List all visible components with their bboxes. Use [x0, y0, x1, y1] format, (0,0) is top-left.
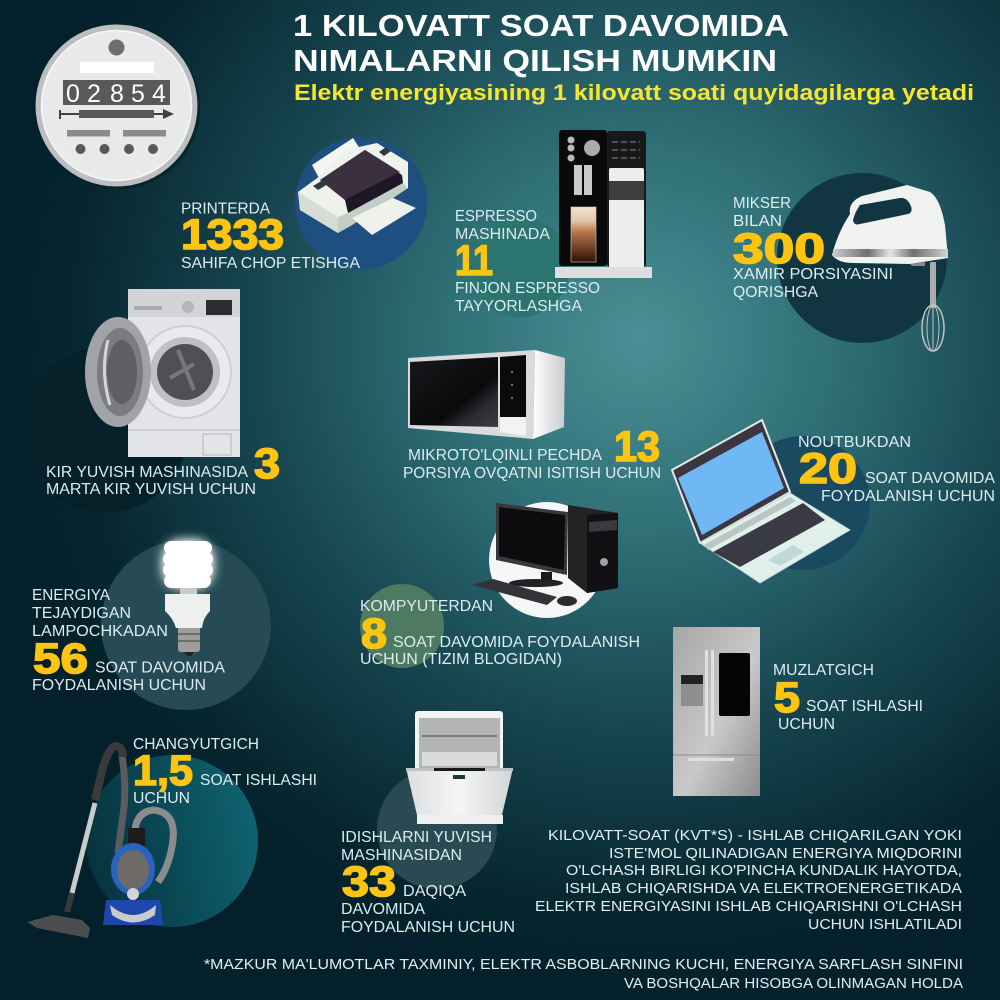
panel: vacuum cleaner: [27, 736, 317, 938]
text: washer label: 3: [254, 440, 280, 488]
icon: electricity meter: [36, 24, 200, 189]
text: laptop label: NOUTBUKDAN: [798, 434, 911, 451]
text: dishwasher label: [341, 829, 515, 936]
icon: energy-saving bulb: [162, 539, 214, 656]
text: vacuum label: [133, 736, 317, 807]
icon: electricity meter: 02854: [66, 80, 166, 108]
icon: microwave: [408, 350, 565, 439]
icon: dishwasher circle: [377, 769, 497, 889]
icon: desktop computer: [472, 503, 618, 606]
title: 1 KILOVATT SOAT DAVOMIDA: [293, 8, 789, 43]
icon: computer circle: [489, 502, 605, 618]
title: [293, 8, 789, 78]
text: lamp label: LAMPOCHKADAN: [32, 623, 168, 640]
text: refrigerator label: UCHUN: [778, 716, 835, 733]
text: laptop label: [798, 434, 995, 505]
text: refrigerator label: [773, 662, 923, 733]
footnote: [204, 957, 963, 992]
text: vacuum label: SOAT ISHLASHI: [200, 772, 317, 789]
panel: computer: [360, 502, 640, 668]
panel: printer: [181, 137, 427, 272]
text: computer label: [360, 598, 640, 668]
icon: printer: [298, 138, 416, 235]
icon: olive circle: [360, 584, 444, 668]
panel: energy-saving lamp: [32, 539, 271, 710]
text: refrigerator label: 5: [774, 674, 800, 722]
text: mixer label: 300: [733, 225, 825, 273]
icon: laptop circle: [736, 436, 870, 570]
text: lamp label: ENERGIYA: [32, 587, 110, 604]
panel: laptop: [672, 420, 995, 583]
text: espresso label: FINJON ESPRESSO: [455, 280, 600, 297]
text: printer label: [181, 200, 360, 272]
text: washer label: MARTA KIR YUVISH UCHUN: [46, 481, 256, 498]
text: lamp label: [32, 587, 225, 694]
icon: vacuum cleaner: [27, 746, 173, 938]
text: dishwasher label: DAQIQA: [403, 883, 466, 900]
text: microwave label: 13: [614, 423, 660, 471]
text: lamp label: 56: [33, 635, 88, 683]
text: mixer label: MIKSER: [733, 195, 791, 212]
text block: kilowatt-hour definition: KILOVATT-SOAT (KVT*S) - ISHLAB CHIQARILGAN YOKI: [548, 828, 962, 844]
text: laptop label: SOAT DAVOMIDA: [865, 470, 995, 487]
panel: washing machine: [22, 289, 280, 513]
icon: washing machine: [85, 289, 240, 457]
text: mixer label: BILAN: [733, 213, 782, 230]
icon: dishwasher: [406, 711, 513, 824]
text: dishwasher label: IDISHLARNI YUVISH: [341, 829, 492, 846]
text block: kilowatt-hour definition: ISTE'MOL QILINADIGAN ENERGIYA MIQDORINI: [609, 846, 962, 862]
text: mixer label: QORISHGA: [733, 284, 818, 301]
text: vacuum label: CHANGYUTGICH: [133, 736, 259, 753]
text: printer label: 1333: [181, 211, 284, 259]
text: espresso label: [455, 208, 600, 315]
icon: vacuum circle: [86, 755, 258, 927]
icon: washer circle: [22, 347, 188, 513]
text: refrigerator label: MUZLATGICH: [773, 662, 874, 679]
text: washer label: [46, 440, 280, 498]
footnote: *MAZKUR MA'LUMOTLAR TAXMINIY, ELEKTR ASBOBLARNING KUCHI, ENERGIYA SARFLASH SINFINI: [204, 957, 963, 973]
icon: espresso circle: [470, 217, 570, 317]
text block: kilowatt-hour definition: [535, 828, 962, 933]
panel: dishwasher: [341, 711, 515, 936]
text: lamp label: FOYDALANISH UCHUN: [32, 677, 206, 694]
subtitle: Elektr energiyasining 1 kilovatt soati quyidagilarga yetadi: [294, 80, 974, 105]
text: dishwasher label: MASHINASIDAN: [341, 847, 462, 864]
text: computer label: 8: [361, 610, 387, 658]
text: lamp label: SOAT DAVOMIDA: [95, 660, 225, 676]
icon: espresso machine: [555, 130, 652, 278]
text block: kilowatt-hour definition: O'LCHASH BIRLIGI KO'PINCHA KUNDALIK HAYOTDA,: [566, 863, 962, 879]
panel: mixer: [733, 173, 948, 351]
text: vacuum label: UCHUN: [133, 790, 190, 807]
icon: refrigerator: [673, 627, 760, 796]
text: dishwasher label: FOYDALANISH UCHUN: [341, 919, 515, 936]
text: refrigerator label: SOAT ISHLASHI: [806, 698, 923, 715]
text: microwave label: MIKROTO'LQINLI PECHDA: [408, 447, 602, 464]
text: espresso label: TAYYORLASHGA: [455, 298, 582, 315]
text: washer label: KIR YUVISH MASHINASIDA: [46, 464, 248, 481]
text: computer label: UCHUN (TIZIM BLOGIDAN): [360, 651, 562, 668]
icon: mixer circle: [777, 173, 947, 343]
text block: kilowatt-hour definition: ISHLAB CHIQARISHDA VA ELEKTROENERGETIKADA: [565, 881, 962, 897]
text: laptop label: FOYDALANISH UCHUN: [821, 488, 995, 505]
text: printer label: PRINTERDA: [181, 200, 270, 218]
panel: microwave: [403, 350, 661, 482]
icon: hand mixer: [832, 185, 948, 351]
text: dishwasher label: 33: [342, 858, 396, 906]
text: printer label: SAHIFA CHOP ETISHGA: [181, 255, 360, 272]
text: computer label: KOMPYUTERDAN: [360, 598, 493, 615]
text: espresso label: MASHINADA: [455, 226, 550, 243]
icon: printer circle: [295, 137, 427, 269]
text: espresso label: 11: [455, 237, 493, 285]
text: microwave label: [403, 423, 661, 482]
text: espresso label: ESPRESSO: [455, 208, 537, 225]
title: NIMALARNI QILISH MUMKIN: [293, 43, 777, 78]
text: dishwasher label: DAVOMIDA: [341, 901, 425, 918]
text: microwave label: PORSIYA OVQATNI ISITISH UCHUN: [403, 465, 661, 482]
text: mixer label: XAMIR PORSIYASINI: [733, 266, 893, 283]
icon: laptop: [672, 420, 850, 583]
text block: kilowatt-hour definition: UCHUN ISHLATILADI: [808, 917, 962, 933]
text: lamp label: TEJAYDIGAN: [32, 605, 131, 622]
text: mixer label: [733, 195, 893, 301]
footnote: VA BOSHQALAR HISOBGA OLINMAGAN HOLDA: [624, 976, 963, 992]
icon: lamp circle: [101, 540, 271, 710]
panel: espresso machine: [455, 130, 652, 317]
text block: kilowatt-hour definition: ELEKTR ENERGIYASINI ISHLAB CHIQARISHNI O'LCHASH: [535, 899, 962, 915]
panel: refrigerator: [673, 627, 923, 796]
text: vacuum label: 1,5: [133, 747, 193, 795]
text: computer label: SOAT DAVOMIDA FOYDALANISH: [393, 634, 640, 651]
text: laptop label: 20: [799, 445, 857, 493]
